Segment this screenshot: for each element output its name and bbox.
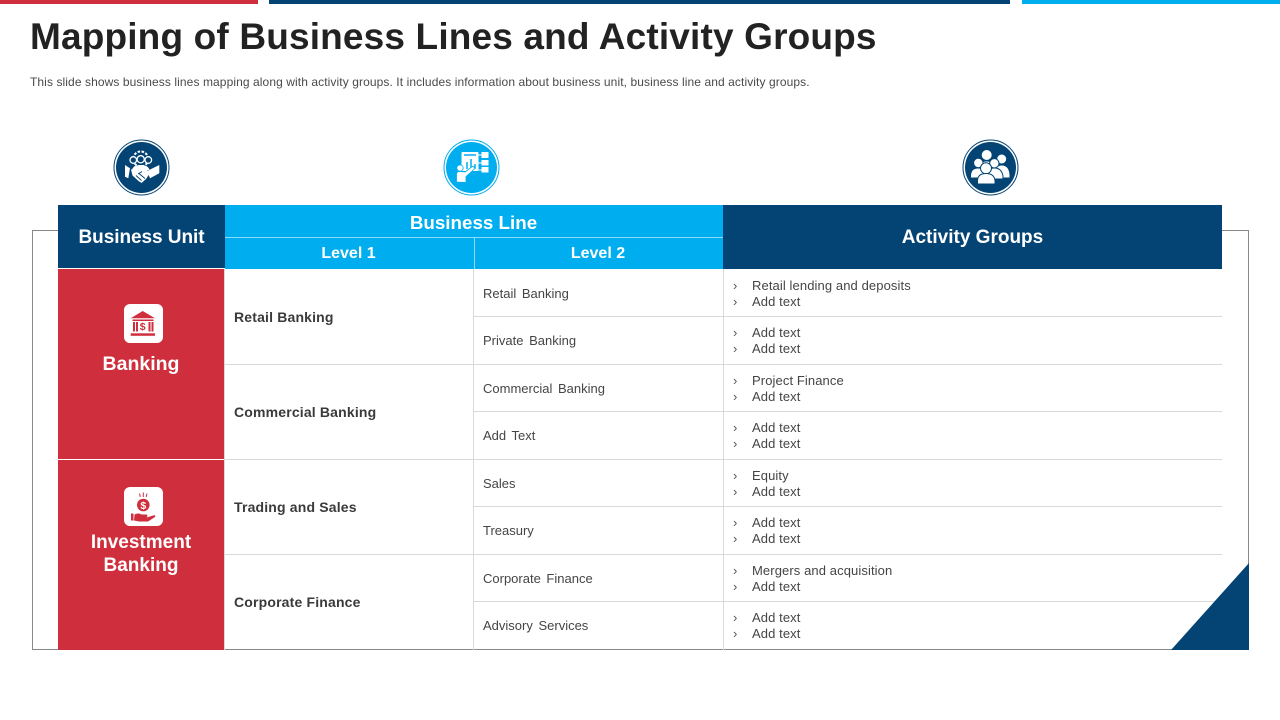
header: Level 1: Level 1 xyxy=(321,244,376,262)
activity: private banking xyxy=(733,325,800,356)
activity: private banking: › xyxy=(733,325,737,340)
icon: hand with coin xyxy=(124,487,163,526)
activity: retail banking: Add text xyxy=(752,294,800,309)
activity: corporate finance xyxy=(733,563,892,594)
activity: sales: Equity xyxy=(752,468,789,483)
activity: advisory services: › xyxy=(733,626,737,641)
level 1: Corporate Finance: Corporate Finance xyxy=(234,594,361,610)
activity: advisory services: Add text xyxy=(752,610,800,625)
activity: advisory services xyxy=(733,610,800,641)
header: Level 2 xyxy=(474,237,723,269)
activity: add text: › xyxy=(733,420,737,435)
activity: retail banking: Retail lending and deposits xyxy=(752,278,911,293)
activity: commercial banking xyxy=(733,373,844,404)
activity: commercial banking: › xyxy=(733,389,737,404)
activity: add text: Add text xyxy=(752,436,800,451)
level 2: Retail Banking: Retail Banking xyxy=(483,286,569,301)
level 2: Treasury: Treasury xyxy=(483,523,534,538)
level 1: Trading and Sales: Trading and Sales xyxy=(234,499,357,515)
activity: private banking: Add text xyxy=(752,325,800,340)
unit cell: Investment Banking xyxy=(58,460,224,650)
activity: corporate finance: › xyxy=(733,579,737,594)
activity: add text: Add text xyxy=(752,420,800,435)
activity: treasury xyxy=(733,515,800,546)
activity: commercial banking: › xyxy=(733,373,737,388)
activity: retail banking xyxy=(733,278,911,309)
activity: sales: › xyxy=(733,484,737,499)
activity: sales: › xyxy=(733,468,737,483)
activity: retail banking: › xyxy=(733,294,737,309)
activity: sales xyxy=(733,468,800,499)
icon: bank xyxy=(124,304,163,343)
header: Level 2: Level 2 xyxy=(571,244,625,262)
activity: commercial banking: Add text xyxy=(752,389,800,404)
corner triangle xyxy=(1171,563,1249,650)
activity: treasury: › xyxy=(733,515,737,530)
activity: corporate finance: › xyxy=(733,563,737,578)
level 2: Private Banking: Private Banking xyxy=(483,333,576,348)
unit label: Investment Banking xyxy=(91,532,191,576)
level 1: Retail Banking: Retail Banking xyxy=(234,309,334,325)
level 2: Add Text: Add Text xyxy=(483,428,535,443)
title: Mapping of Business Lines and Activity Groups xyxy=(30,16,877,57)
level 2: Advisory Services: Advisory Services xyxy=(483,618,588,633)
level 2: Commercial Banking: Commercial Banking xyxy=(483,381,605,396)
header: Activity Groups xyxy=(723,205,1222,269)
table grid lines xyxy=(224,269,1222,650)
activity: advisory services: › xyxy=(733,610,737,625)
activity: sales: Add text xyxy=(752,484,800,499)
activity: treasury: Add text xyxy=(752,515,800,530)
unit cell: Banking xyxy=(58,269,224,459)
activity: treasury: Add text xyxy=(752,531,800,546)
header: Business Line: Business Line xyxy=(410,212,537,232)
activity: private banking: › xyxy=(733,341,737,356)
header: Business Unit: Business Unit xyxy=(78,227,205,248)
activity: corporate finance: Mergers and acquisition xyxy=(752,563,892,578)
activity: commercial banking: Project Finance xyxy=(752,373,844,388)
activity: add text xyxy=(733,420,800,451)
unit label: Investment Banking: Banking xyxy=(104,555,178,576)
level 2: Sales: Sales xyxy=(483,476,516,491)
activity: corporate finance: Add text xyxy=(752,579,800,594)
activity: advisory services: Add text xyxy=(752,626,800,641)
unit label: Investment Banking: Investment xyxy=(91,532,191,553)
unit label: Banking: Banking xyxy=(103,352,179,374)
activity: retail banking: › xyxy=(733,278,737,293)
subtitle: This slide shows business lines mapping along with activity groups. It includes information about business unit, business line and activity groups. xyxy=(30,75,810,89)
activity: add text: › xyxy=(733,436,737,451)
icon: hand with coin: $ xyxy=(140,500,146,512)
level 1: Commercial Banking: Commercial Banking xyxy=(234,404,376,420)
header: Business Unit xyxy=(58,205,225,268)
level 2: Corporate Finance: Corporate Finance xyxy=(483,571,593,586)
icon: activity groups people xyxy=(962,140,1018,196)
top accent bars xyxy=(0,0,1280,4)
outer frame xyxy=(32,230,1249,650)
header: Activity Groups: Activity Groups xyxy=(902,227,1043,248)
header: Level 1 xyxy=(225,237,474,269)
icon: business line chart and hand xyxy=(444,140,500,196)
activity: private banking: Add text xyxy=(752,341,800,356)
icon: business unit handshake xyxy=(114,140,170,196)
activity: treasury: › xyxy=(733,531,737,546)
icon: bank: $ xyxy=(140,321,146,333)
header: Business Line xyxy=(225,205,723,237)
